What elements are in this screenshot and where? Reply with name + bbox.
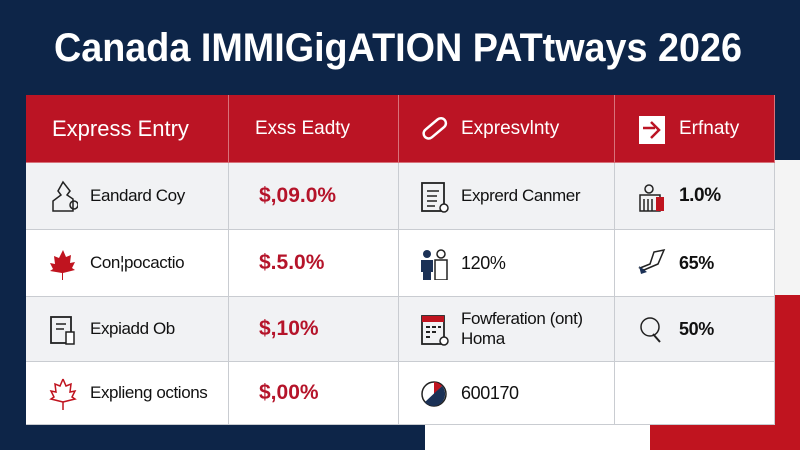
row 4 bbox=[26, 362, 775, 425]
header 1: Express Entry bbox=[52, 116, 189, 140]
row 1: Eandard Coy bbox=[90, 186, 185, 205]
header 1 bbox=[26, 95, 229, 163]
title: Canada IMMIGigATION PATtways 2026 bbox=[54, 26, 742, 70]
row 2: 65% bbox=[679, 252, 714, 272]
row 3 bbox=[26, 297, 775, 362]
row 2: $.5.0% bbox=[259, 251, 324, 274]
row 4: 600170 bbox=[461, 382, 519, 402]
header 4: Erfnaty bbox=[679, 118, 739, 138]
header 3: Expresvlnty bbox=[461, 118, 559, 138]
row 1: Exprerd Canmer bbox=[461, 186, 580, 205]
header row bbox=[26, 95, 775, 163]
row 3: 50% bbox=[679, 318, 714, 338]
row 4: $,00% bbox=[259, 381, 319, 404]
table bbox=[26, 95, 775, 425]
header 4 bbox=[615, 95, 775, 163]
row 2 bbox=[26, 230, 775, 297]
header 2: Exss Eadty bbox=[255, 118, 350, 138]
row 2: Con¦pocactio bbox=[90, 253, 184, 272]
row 1: $,09.0% bbox=[259, 184, 336, 207]
bottom stripe: red bbox=[650, 295, 800, 450]
row 4: Explieng octions bbox=[90, 383, 207, 402]
header 3 bbox=[399, 95, 615, 163]
row 2: 120% bbox=[461, 252, 505, 272]
row 3: Expiadd Ob bbox=[90, 319, 175, 338]
header 2 bbox=[229, 95, 399, 163]
right stripe: white bbox=[770, 160, 800, 295]
row 3: Fowferation (ont) bbox=[461, 309, 583, 328]
row 3: $,10% bbox=[259, 317, 319, 340]
bottom stripe: white bbox=[425, 420, 650, 450]
row 1: 1.0% bbox=[679, 185, 721, 206]
row 3: Homa bbox=[461, 329, 505, 348]
row 1 bbox=[26, 163, 775, 230]
